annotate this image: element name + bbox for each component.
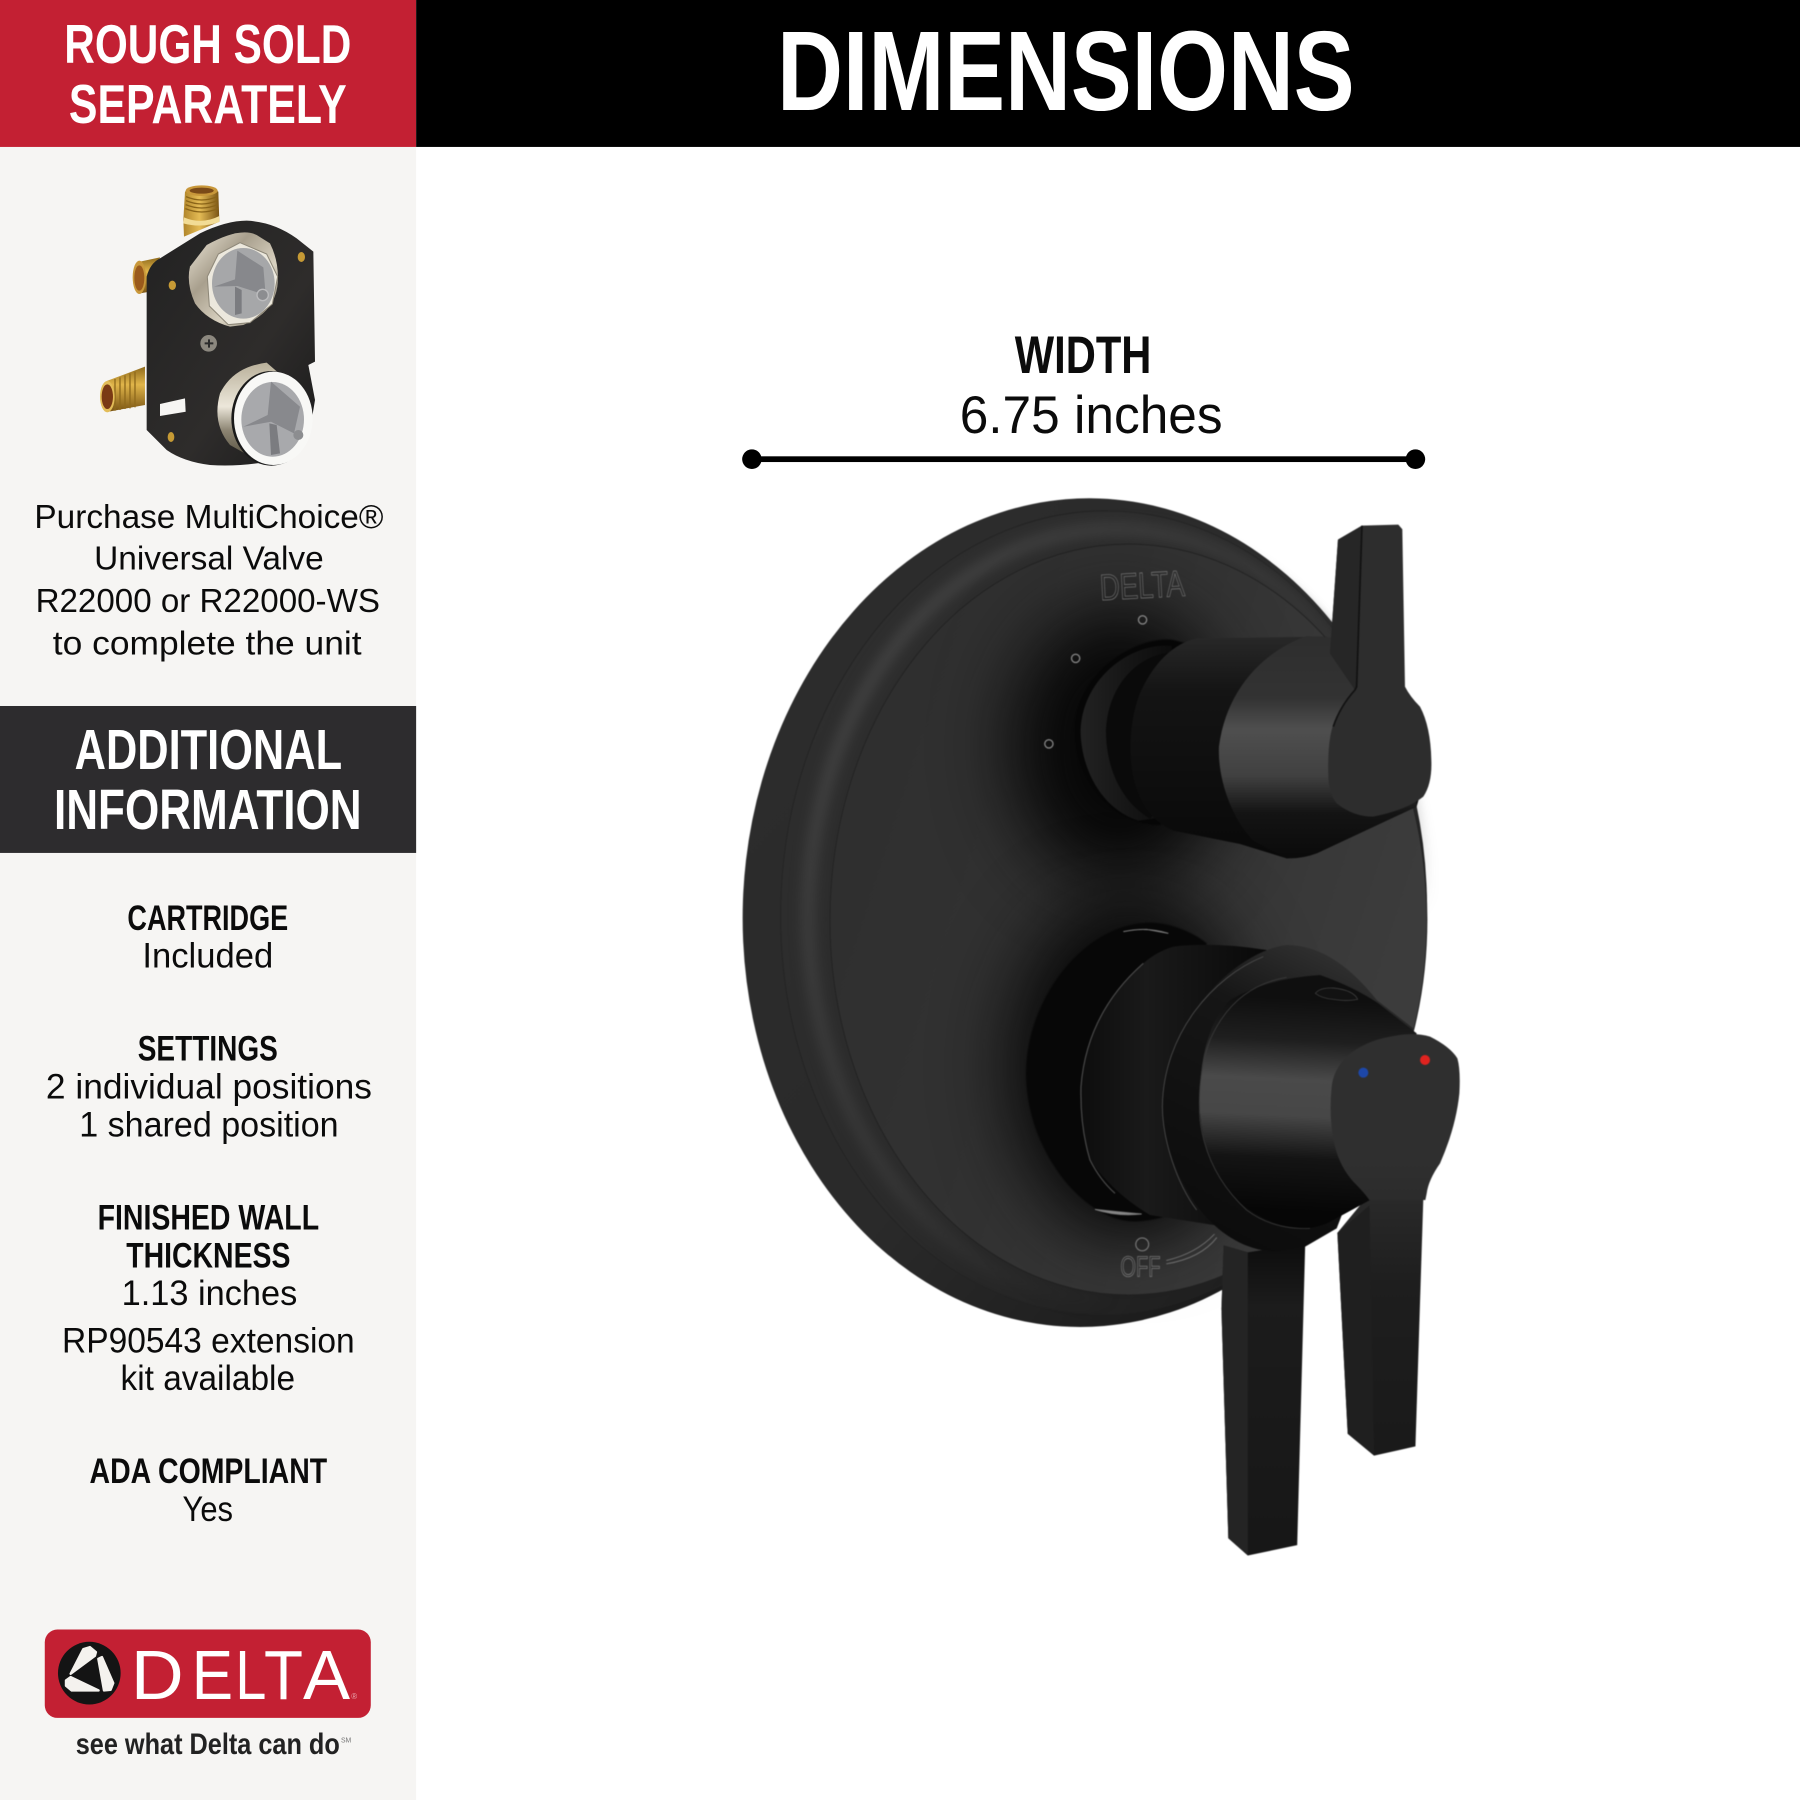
rim highlight xyxy=(808,529,1423,1301)
brass side outlet xyxy=(133,257,160,294)
spec: finished wall thickness: kit available xyxy=(121,1358,295,1398)
logo wordmark xyxy=(131,1636,350,1714)
spec: finished wall thickness: 1.13 inches xyxy=(122,1273,297,1313)
heading band: additional information: ADDITIONAL xyxy=(75,718,342,781)
chrome rim highlights xyxy=(1095,929,1168,1215)
logo wordmark: E xyxy=(192,1636,233,1714)
upper handle lit cone xyxy=(1219,636,1417,858)
spec: cartridge: CARTRIDGE xyxy=(127,898,288,938)
engraved OFF mark: OFF xyxy=(1120,1252,1161,1284)
spec: ada compliant xyxy=(90,1451,327,1529)
banner: rough sold separately xyxy=(0,0,416,147)
spec: finished wall thickness: RP90543 extension xyxy=(62,1320,355,1360)
plate shadows xyxy=(1010,608,1251,1240)
upper lever edge xyxy=(1333,526,1362,727)
spec: finished wall thickness xyxy=(62,1197,355,1398)
dimension line xyxy=(742,449,1425,469)
spec: ada compliant: ADA COMPLIANT xyxy=(90,1451,327,1491)
text block: purchase valve note: R22000 or R22000-WS xyxy=(36,583,380,620)
logo wordmark: A xyxy=(303,1636,350,1714)
plate slot xyxy=(160,398,186,416)
banner: rough sold separately: ROUGH SOLD xyxy=(64,13,351,75)
logo mark xyxy=(58,1642,121,1704)
upper lever left facet xyxy=(1330,526,1362,690)
lower handle base shadow xyxy=(1026,923,1207,1221)
icon: rough-in universal valve xyxy=(100,185,315,466)
upper flange shadow xyxy=(1075,640,1187,825)
spec: ada compliant: Yes xyxy=(183,1489,233,1529)
lower handle xyxy=(1026,923,1460,1555)
product: shower valve trim xyxy=(728,487,1460,1555)
spec: cartridge xyxy=(127,898,288,976)
logo: delta: see what Delta can do xyxy=(76,1728,340,1761)
cold indicator xyxy=(1358,1068,1368,1078)
heading band: additional information: INFORMATION xyxy=(54,778,362,841)
collar edge highlight xyxy=(1162,957,1263,1210)
logo: delta: SM xyxy=(341,1738,352,1745)
spec: finished wall thickness: THICKNESS xyxy=(126,1235,290,1275)
width label: 6.75 inches xyxy=(960,386,1223,445)
upper flange groove xyxy=(1106,653,1177,819)
spec: settings: 1 shared position xyxy=(79,1104,339,1144)
width label xyxy=(960,326,1223,445)
spec: settings: SETTINGS xyxy=(138,1029,278,1069)
heading band: additional information xyxy=(0,706,416,853)
left lever facet xyxy=(1221,1246,1248,1555)
header band: dimensions xyxy=(416,0,1800,147)
escutcheon outer rim xyxy=(728,487,1441,1339)
screw xyxy=(200,335,217,352)
spec: settings: 2 individual positions xyxy=(46,1067,372,1107)
text block: purchase valve note: Universal Valve xyxy=(94,540,324,577)
engraved OFF mark xyxy=(1120,1234,1217,1284)
upper valve port xyxy=(189,232,278,327)
spec: cartridge: Included xyxy=(142,936,273,976)
logo: delta xyxy=(45,1630,371,1761)
banner: rough sold separately: SEPARATELY xyxy=(69,73,347,135)
engraved DELTA mark: DELTA xyxy=(1099,563,1186,608)
cone inner edge xyxy=(1199,977,1310,1228)
text block: purchase valve note xyxy=(34,499,383,662)
width label: WIDTH xyxy=(1015,326,1151,385)
escutcheon middle ring xyxy=(774,505,1433,1320)
lower valve port xyxy=(217,363,313,466)
lever cap xyxy=(1331,1034,1460,1200)
header band: dimensions: DIMENSIONS xyxy=(777,8,1355,135)
logo wordmark: D xyxy=(131,1636,184,1714)
right lever facet xyxy=(1337,1205,1374,1456)
left lever xyxy=(1221,1243,1305,1555)
escutcheon face plate xyxy=(830,544,1427,1295)
upper handle xyxy=(1075,525,1431,858)
indicator dots xyxy=(1045,616,1147,748)
upper handle body xyxy=(1131,637,1430,858)
lower handle sleeve xyxy=(1081,945,1267,1233)
black mounting plate xyxy=(147,221,315,465)
brass top outlet xyxy=(183,185,219,237)
text block: purchase valve note: Purchase MultiChoice® xyxy=(34,499,383,536)
temperature button xyxy=(1315,988,1358,1001)
logo: delta: ® xyxy=(351,1692,357,1701)
lower handle cone xyxy=(1200,975,1417,1229)
hot indicator xyxy=(1420,1055,1430,1065)
right lever xyxy=(1337,1194,1423,1456)
spec: settings xyxy=(46,1029,372,1144)
plate holes xyxy=(168,252,305,442)
sleeve edge highlight xyxy=(1081,963,1143,1193)
upper flange rim xyxy=(1081,646,1173,821)
logo wordmark: L xyxy=(235,1636,266,1714)
logo wordmark: T xyxy=(264,1636,303,1714)
brass lower outlet xyxy=(100,358,287,412)
text block: purchase valve note: to complete the unit xyxy=(53,625,362,662)
lower handle collar xyxy=(1162,945,1413,1252)
upper lever xyxy=(1328,525,1431,817)
sidebar panel xyxy=(0,0,416,1800)
spec: finished wall thickness: FINISHED WALL xyxy=(98,1197,319,1237)
